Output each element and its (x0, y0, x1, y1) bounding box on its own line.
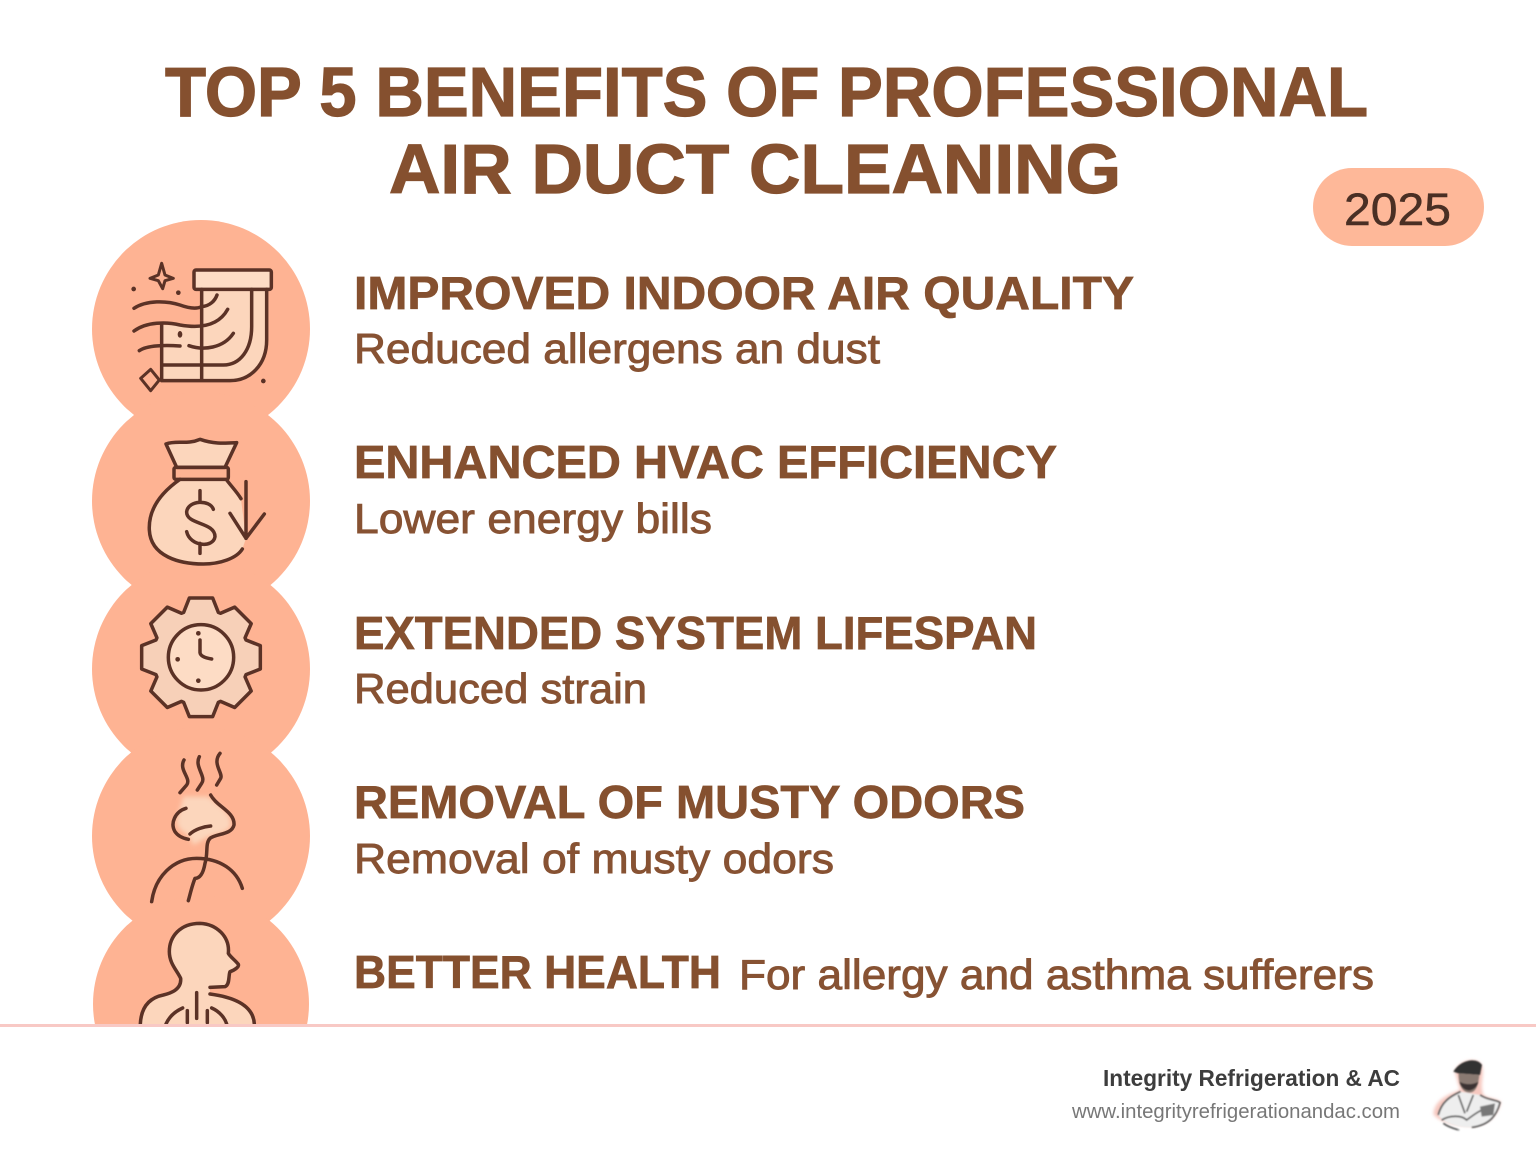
icon column background (92, 220, 310, 1112)
benefit 1: Reduced allergens an dust (354, 325, 880, 372)
benefit 3: EXTENDED SYSTEM LIFESPAN (354, 607, 1037, 659)
icon: air duct (131, 263, 271, 391)
title: TOP 5 BENEFITS OF PROFESSIONAL (165, 53, 1368, 131)
benefit 2: ENHANCED HVAC EFFICIENCY (354, 436, 1057, 488)
year badge: 2025 (1344, 184, 1451, 235)
benefit 3 (354, 607, 1037, 712)
icon: head and lungs (139, 923, 255, 1025)
title (165, 53, 1368, 208)
icon: nose smelling odors (152, 753, 242, 902)
icon: technician logo (1433, 1060, 1501, 1130)
benefit 5: BETTER HEALTH (354, 946, 721, 998)
benefit 1: IMPROVED INDOOR AIR QUALITY (354, 267, 1134, 319)
title: AIR DUCT CLEANING (389, 130, 1121, 208)
icon: money bag with falling cost arrow (149, 439, 264, 564)
footer band (0, 1024, 1536, 1154)
benefit 5: For allergy and asthma sufferers (739, 951, 1374, 998)
footer website: www.integrityrefrigerationandac.com (1071, 1101, 1400, 1123)
year badge (1313, 168, 1484, 246)
benefit 5 (354, 946, 1374, 998)
benefit 4 (354, 776, 1025, 882)
icon: gear with clock (142, 598, 260, 717)
benefit 2: Lower energy bills (354, 495, 712, 542)
benefit 4: REMOVAL OF MUSTY ODORS (354, 776, 1025, 828)
benefit 2 (354, 436, 1057, 542)
footer company name: Integrity Refrigeration & AC (1103, 1065, 1400, 1091)
benefit 3: Reduced strain (354, 665, 647, 712)
benefit 4: Removal of musty odors (354, 835, 834, 882)
benefit 1 (354, 267, 1134, 372)
